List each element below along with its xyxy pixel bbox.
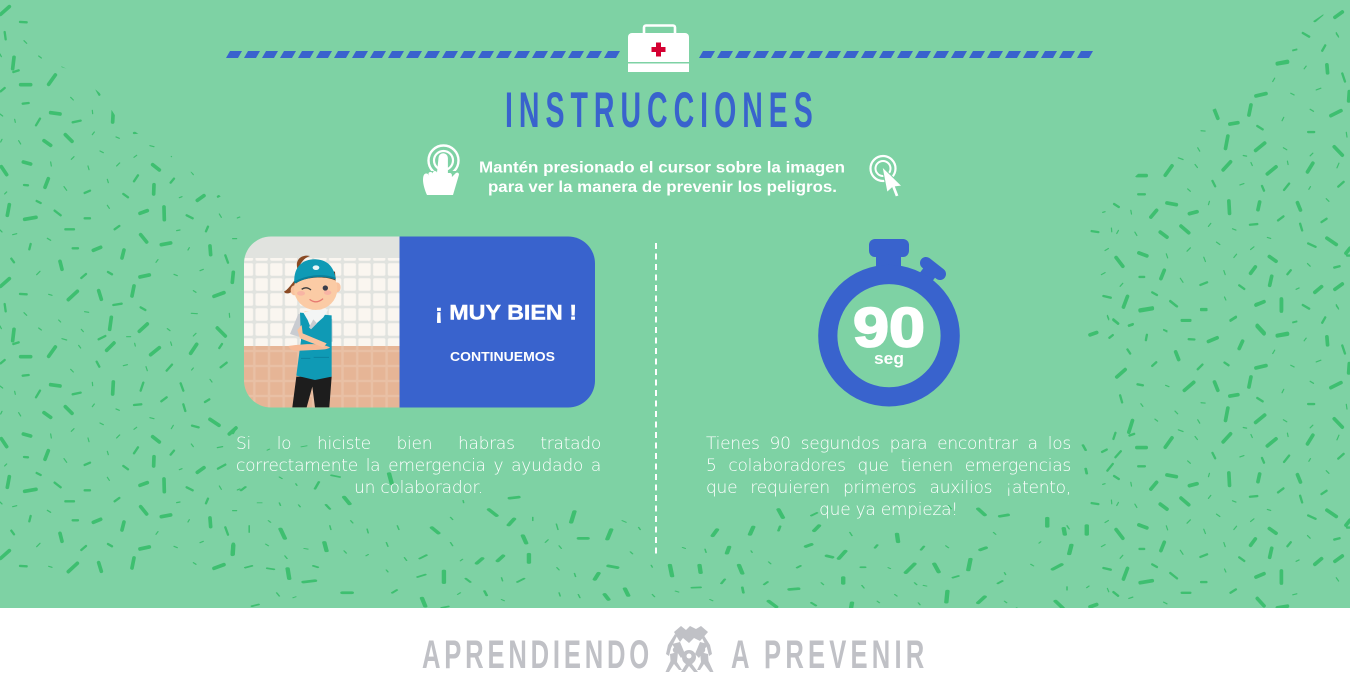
- footer text right: A PREVENIR: [731, 633, 924, 678]
- text block: left explanation: Si lo hiciste bien habras tratado: [236, 434, 601, 454]
- text block: left explanation: correctamente la emergencia y ayudado a: [236, 456, 601, 476]
- icon: hand touching: [423, 146, 461, 195]
- text block: right explanation: 5 colaboradores que tienen emergencias: [706, 456, 1071, 476]
- stopwatch unit: seg: [874, 349, 904, 368]
- footer logo: [666, 626, 714, 672]
- icon: first aid kit: [628, 26, 689, 72]
- divider: [655, 243, 657, 558]
- speck pattern: right side: [1090, 0, 1350, 608]
- character: collaborator: [284, 256, 341, 407]
- instruction text: Mantén presionado el cursor sobre la imagen: [479, 160, 845, 176]
- text block: left explanation: [236, 434, 601, 498]
- text block: left explanation: un colaborador.: [354, 478, 483, 498]
- footer band: [0, 608, 1350, 700]
- text block: right explanation: [706, 434, 1071, 520]
- panel: muy bien card: [244, 236, 596, 408]
- instruction text: para ver la manera de prevenir los peligros.: [488, 179, 837, 196]
- text block: right explanation: que ya empieza!: [819, 500, 958, 520]
- footer text left: APRENDIENDO: [422, 633, 649, 678]
- speck pattern: left side: [0, 0, 240, 572]
- title: INSTRUCCIONES: [505, 82, 813, 138]
- card scene background: [244, 236, 596, 408]
- card button label: CONTINUEMOS: [450, 349, 555, 364]
- text block: right explanation: que requieren primeros auxilios ¡atento,: [706, 478, 1071, 498]
- text block: right explanation: Tienes 90 segundos para encontrar a los: [706, 434, 1071, 454]
- dashed header rule: right: [699, 51, 1093, 58]
- instruction text: [479, 160, 845, 196]
- speck pattern: centre bottom band: [233, 428, 1089, 610]
- stopwatch number: 90: [853, 296, 925, 358]
- card heading: ¡ MUY BIEN !: [435, 300, 577, 324]
- icon: stopwatch: [828, 239, 950, 397]
- icon: cursor click: [870, 156, 902, 197]
- dashed header rule: left: [226, 51, 620, 58]
